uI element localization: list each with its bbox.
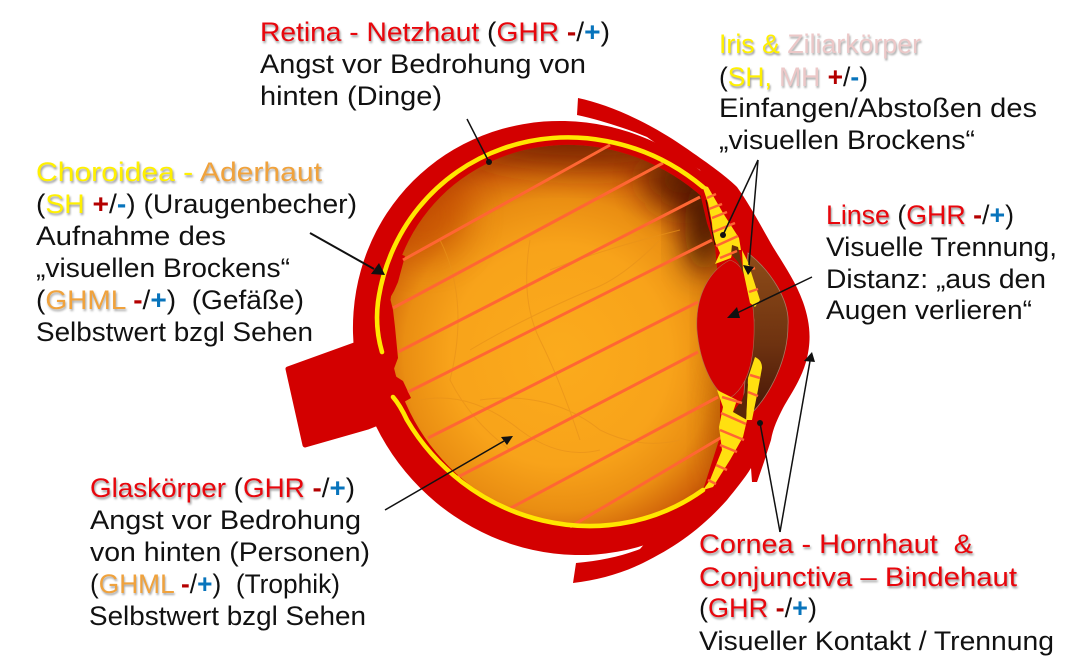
text block: choroid: „visuellen Brockens“ [36, 253, 290, 283]
text block: lens: Linse (GHR -/+) [826, 200, 1014, 230]
text block: choroid: (GHML -/+) (Gefäße) [36, 285, 304, 315]
lens [697, 260, 754, 398]
choroid yellow layer lower [393, 397, 703, 526]
lower iris [746, 357, 762, 420]
text block: choroid: Selbstwert bzgl Sehen [36, 317, 313, 347]
retina wall bump at optic disc [370, 250, 411, 410]
text block: lens [826, 200, 1057, 325]
text block: cornea and conjunctiva: Visueller Kontakt / Trennung [699, 626, 1054, 656]
arrows: iris and ciliary body [720, 160, 758, 275]
text block: vitreous body: Selbstwert bzgl Sehen [89, 601, 366, 631]
text block: choroid: Aufnahme des [36, 221, 226, 251]
text block: iris and ciliary body [719, 29, 1037, 155]
conjunctiva and cornea [573, 98, 810, 583]
text block: retina: hinten (Dinge) [260, 81, 442, 111]
eye diagram [285, 98, 810, 583]
ciliary inner edge [706, 200, 715, 245]
lower iris slot [733, 383, 748, 421]
ciliary stripes [707, 194, 760, 484]
text block: vitreous body [89, 473, 370, 631]
lower ciliary body [703, 390, 747, 490]
text block: retina: Retina - Netzhaut (GHR -/+) [260, 17, 610, 47]
text block: vitreous body: Glaskörper (GHR -/+) [90, 473, 355, 503]
arrow: choroid [310, 233, 385, 275]
arrow: retina [467, 119, 492, 165]
text block: iris and ciliary body: Iris & Ziliarkörper [719, 29, 921, 59]
text block: retina: Angst vor Bedrohung von [260, 49, 586, 79]
text block: cornea and conjunctiva: Cornea - Hornhaut & [699, 529, 973, 559]
anterior chamber [742, 253, 788, 420]
arrows: cornea and conjunctiva [757, 352, 815, 532]
text block: choroid [36, 157, 357, 347]
text block: vitreous body: (GHML -/+) (Trophik) [90, 569, 340, 599]
text block: lens: Augen verlieren“ [826, 295, 1032, 325]
choroid yellow layer upper [377, 137, 703, 352]
text block: vitreous body: von hinten (Personen) [90, 537, 370, 567]
text block: lens: Distanz: „aus den [826, 264, 1046, 294]
sclera [263, 31, 877, 645]
retina stripes [393, 145, 722, 527]
text block: iris and ciliary body: Einfangen/Abstoßen des [719, 93, 1037, 123]
text block: retina [260, 17, 610, 111]
arrow: vitreous body [385, 436, 513, 510]
text block: choroid: (SH +/-) (Uraugenbecher) [36, 189, 357, 219]
vitreous shading [404, 144, 720, 468]
text block: iris and ciliary body: (SH, MH +/-) [719, 62, 868, 92]
optic nerve [288, 343, 385, 445]
text block: cornea and conjunctiva [699, 529, 1054, 656]
text block: cornea and conjunctiva: Conjunctiva – Bindehaut [699, 562, 1018, 592]
upper iris [742, 250, 760, 307]
vessels [420, 230, 680, 452]
text block: choroid: Choroidea - Aderhaut [36, 157, 323, 187]
upper ciliary body [702, 185, 741, 264]
upper iris slot [731, 245, 745, 277]
text block: iris and ciliary body: „visuellen Brockens“ [719, 125, 975, 155]
text block: lens: Visuelle Trennung, [826, 232, 1057, 262]
vitreous body [390, 144, 720, 524]
arrow: lens [727, 277, 812, 318]
text block: cornea and conjunctiva: (GHR -/+) [699, 593, 817, 623]
text block: vitreous body: Angst vor Bedrohung [90, 505, 361, 535]
